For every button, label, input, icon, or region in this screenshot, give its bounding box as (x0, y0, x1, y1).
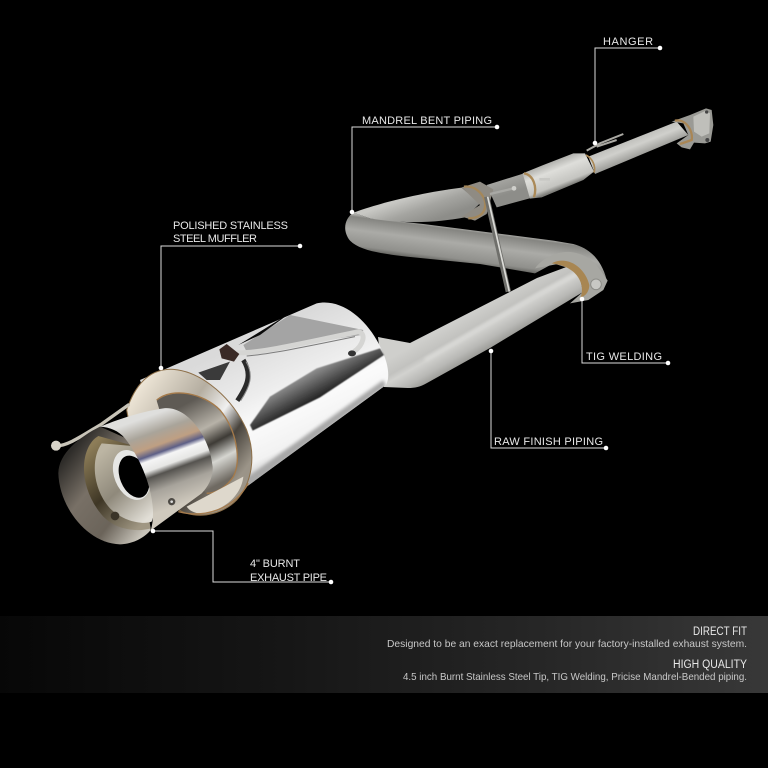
callout: raw finish piping: RAW FINISH PIPING (494, 436, 603, 448)
mid reflection band (250, 348, 384, 431)
callout: mandrel bent piping: MANDREL BENT PIPING (362, 115, 492, 127)
catalytic section (523, 153, 594, 199)
rear pipe (588, 122, 688, 174)
hanger arm (587, 134, 623, 151)
callout: tig welding: TIG WELDING (586, 351, 662, 363)
rod arm (490, 188, 515, 194)
callout: mandrel bent piping (350, 115, 499, 214)
muffler body (140, 303, 388, 487)
inner cone (95, 443, 162, 523)
pipe after clamp (487, 173, 533, 207)
pipe highlight (425, 273, 578, 360)
panel text: direct fit (387, 626, 747, 650)
tip opening (84, 436, 151, 530)
weld beads (524, 155, 595, 197)
tip hanger (56, 405, 128, 446)
inner collar (157, 393, 237, 493)
dark wedge (238, 313, 291, 345)
reflection under flange (198, 362, 230, 380)
upper reflection (243, 315, 363, 352)
panel text: direct fit: Designed to be an exact replacement for your factory-installed exhaust system. (387, 638, 747, 650)
bottom info panel background (0, 616, 768, 693)
muffler flange (127, 369, 252, 515)
panel text: direct fit: DIRECT FIT (693, 626, 747, 638)
callout: burnt exhaust pipe (151, 529, 333, 584)
rear flange (672, 108, 713, 149)
muffler (51, 303, 388, 544)
rear pipe assembly (345, 108, 713, 292)
callout: raw finish piping (489, 349, 608, 450)
tip bolt (168, 498, 175, 505)
callout: burnt exhaust pipe: 4" BURNT (250, 558, 300, 570)
main raw piping (378, 263, 583, 388)
callout: polished stainless steel muffler: STEEL MUFFLER (173, 233, 257, 245)
callout: polished stainless steel muffler (159, 220, 302, 370)
inner bolt (111, 512, 119, 520)
callout: polished stainless steel muffler: POLISHED STAINLESS (173, 220, 288, 232)
callout: burnt exhaust pipe: EXHAUST PIPE (250, 572, 327, 584)
exhaust system product image (51, 108, 713, 544)
lower flange light (187, 477, 243, 513)
burnt tip outer (100, 408, 213, 531)
tig weld flange (535, 252, 608, 303)
panel text: high quality (403, 659, 747, 683)
panel text: high quality: 4.5 inch Burnt Stainless Steel Tip, TIG Welding, Pricise Mandrel-Bended piping. (403, 671, 747, 683)
lower soft shade (243, 380, 386, 487)
upper pipe to clamp (353, 188, 480, 222)
panel text: high quality: HIGH QUALITY (673, 659, 747, 671)
callout: hanger (593, 36, 662, 145)
bore (106, 444, 157, 506)
s-bend pipe (345, 213, 607, 280)
strap mount (219, 344, 239, 362)
callout: tig welding (580, 297, 670, 365)
clamp flange (462, 182, 493, 221)
tip rim (58, 427, 151, 544)
strap (237, 332, 363, 353)
support rod (487, 197, 508, 292)
callout: hanger: HANGER (603, 36, 654, 48)
